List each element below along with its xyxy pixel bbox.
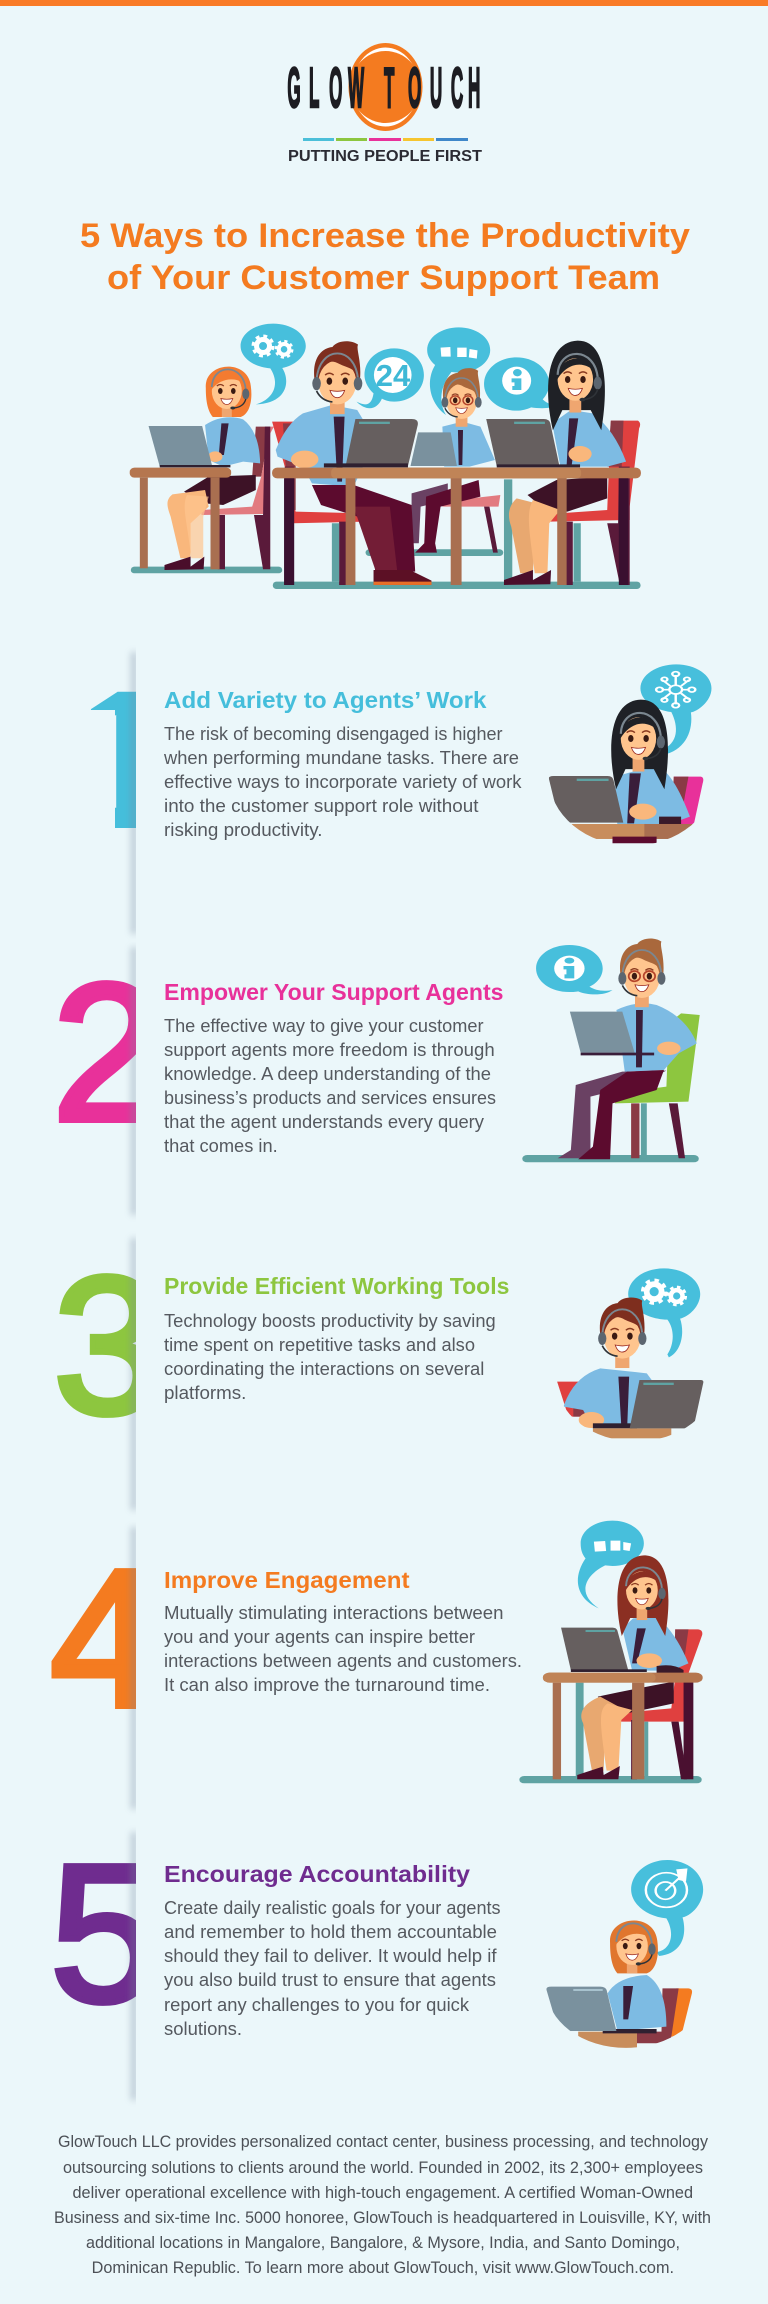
logo [287,43,483,165]
speech bubble: typing dots [427,327,490,415]
seated figure [549,765,703,843]
footer text: additional locations in Mangalore, Bangalore, & Mysore, India, and Santo Domingo, [86,2233,680,2252]
body 2: support agents more freedom is through [164,1040,495,1060]
section 5 text [164,1861,501,2039]
body 1: into the customer support role without [164,796,479,816]
speech bubble: network [640,664,711,754]
seated figure [561,1555,688,1779]
speech bubble: gears [628,1268,700,1357]
footer text: deliver operational excellence with high-touch engagement. A certified Woman-Owned [72,2183,693,2202]
section 4 number: 4 [50,1529,159,1748]
section 3 number: 3 [53,1236,162,1455]
seated figure [546,1975,692,2048]
body 4: interactions between agents and customers. [164,1651,522,1671]
speech bubble: target [631,1860,703,1956]
person: man with tie [272,341,432,585]
section 5 number: 5 [50,1824,159,2043]
chair [615,1013,700,1158]
body 2 [164,1016,496,1156]
body 2: that comes in. [164,1136,278,1156]
body 4: It can also improve the turnaround time. [164,1675,490,1695]
footer text: Dominican Republic. To learn more about GlowTouch, visit www.GlowTouch.com. [92,2258,674,2277]
top bar [0,0,768,6]
panel edge shadows [131,652,137,2100]
body 2: The effective way to give your customer [164,1016,484,1036]
desk [543,1673,703,1779]
person: small man in back [410,368,500,553]
desk left [130,468,231,569]
speech bubble: gears [241,324,306,404]
body 1: effective ways to incorporate variety of work [164,772,523,792]
desk right [272,468,641,585]
footer text: outsourcing solutions to clients around the world. Founded in 2002, its 2,300+ employees [63,2158,703,2177]
body 2: business’s products and services ensures [164,1088,496,1108]
section 2 illustration: man with glasses on green chair [522,938,700,1162]
body 3: time spent on repetitive tasks and also [164,1335,475,1355]
section 1 text [163,687,523,840]
logo wordmark: GLOWTOUCH [287,56,480,119]
seated figure [558,938,697,1159]
body 5: should they fail to deliver. It would help if [164,1946,498,1966]
footer text: Business and six-time Inc. 5000 honoree, GlowTouch is headquartered in Louisville, KY, with [54,2208,711,2227]
body 1 [163,724,523,840]
body 1: The risk of becoming disengaged is higher [164,724,503,744]
floor bar [522,1155,699,1162]
body 1: when performing mundane tasks. There are [163,748,519,768]
heading 1: Add Variety to Agents’ Work [164,687,487,713]
logo emblem [348,43,422,131]
heading 4: Improve Engagement [164,1567,410,1593]
hero illustration: support team at desks [130,324,641,589]
body 5: you also build trust to ensure that agents [164,1970,496,1990]
floor bars [131,549,641,589]
section 1 illustration: woman at laptop [549,664,711,843]
body 1: risking productivity. [164,820,322,840]
body 3 [164,1311,496,1403]
speech bubble: info [484,357,558,411]
chair [576,1629,702,1779]
body 5: Create daily realistic goals for your agents [164,1898,501,1918]
person: woman with black hair [486,341,640,585]
title: of Your Customer Support Team [107,259,660,297]
footer text: GlowTouch LLC provides personalized contact center, business processing, and technology [58,2132,708,2151]
body 5: and remember to hold them accountable [164,1922,497,1942]
section 3 illustration: man at laptop [557,1268,703,1438]
body 4: Mutually stimulating interactions between [164,1603,504,1623]
seated figure [557,1368,703,1438]
speech bubble: 24 [357,348,424,408]
section 2 number: 2 [52,943,161,1162]
section 4 text [164,1567,522,1695]
person: woman with orange hair [130,367,274,570]
floor bar [519,1776,702,1783]
hero bubble text: 24 [376,358,411,393]
logo colour bars [303,138,468,141]
section 5 illustration: woman at laptop with target bubble [546,1860,703,2048]
title: 5 Ways to Increase the Productivity [80,217,690,255]
body 5: solutions. [164,2019,242,2039]
body 5 [164,1898,501,2039]
body 4 [164,1603,522,1695]
body 3: platforms. [164,1383,246,1403]
head: orange hair [610,1921,658,1973]
body 5: report any challenges to you for quick [164,1995,470,2015]
title [80,217,690,297]
heading 3: Provide Efficient Working Tools [164,1273,509,1299]
heading 5: Encourage Accountability [164,1861,470,1887]
section 4 illustration: woman at desk [519,1521,703,1783]
speech bubble: typing dots [578,1521,644,1608]
section 2 text [164,979,504,1156]
head: brown quiff [598,1297,646,1368]
speech bubble: info [536,945,612,994]
footer text [54,2132,711,2277]
head: black hair [611,700,668,789]
body 3: Technology boosts productivity by saving [164,1311,496,1331]
body 2: knowledge. A deep understanding of the [164,1064,491,1084]
heading 2: Empower Your Support Agents [164,979,504,1005]
body 2: that the agent understands every query [164,1112,484,1132]
logo tagline: PUTTING PEOPLE FIRST [288,148,483,165]
body 3: coordinating the interactions on several [164,1359,484,1379]
section 1 number: 1 [70,649,180,870]
section 3 text [164,1273,509,1403]
body 4: you and your agents can inspire better [164,1627,475,1647]
